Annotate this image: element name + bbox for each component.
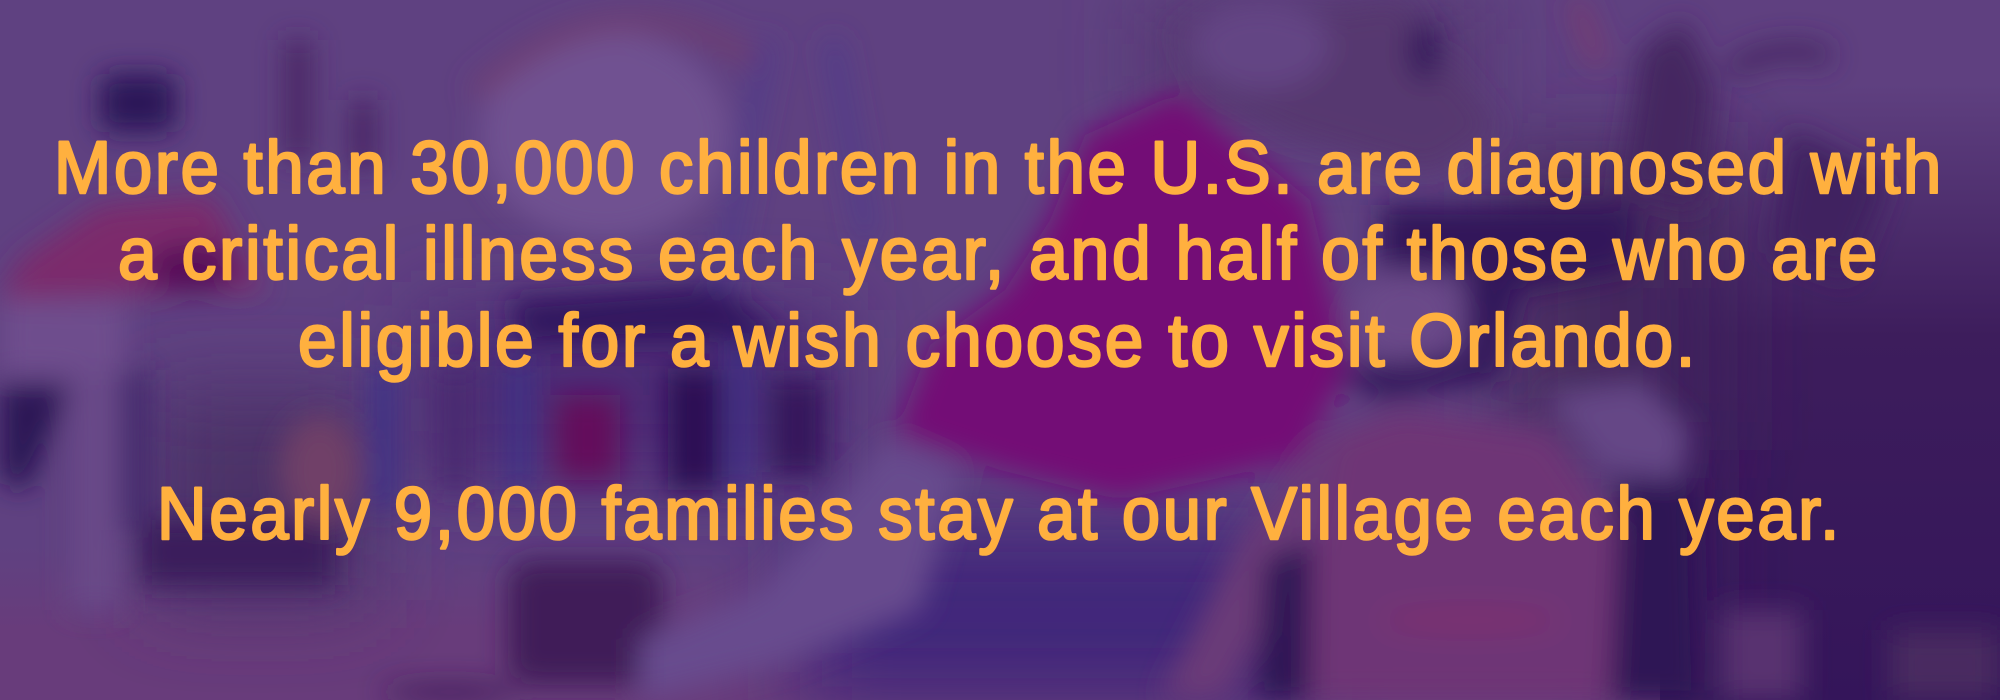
arch and red lettering — [480, 30, 730, 240]
upper-left dark objects — [100, 74, 176, 132]
red table — [0, 195, 265, 300]
coloured bars in the centre — [372, 360, 396, 510]
girl in pink — [1310, 410, 1640, 700]
text: line three: eligible for a wish choose to visit Orlando. — [298, 299, 1698, 382]
statistic text block — [54, 126, 1944, 555]
white panel at left — [0, 300, 125, 375]
magenta shirt — [895, 92, 1350, 500]
plants on the right — [1620, 20, 1715, 210]
seated figure head and mascot — [1175, 0, 1500, 175]
text: families per year: Nearly 9,000 families stay at our Village each year. — [157, 472, 1842, 555]
shelves low left — [140, 520, 335, 585]
arm and leg in pale purple — [640, 440, 960, 700]
text: line two: a critical illness each year, and half of those who are — [118, 212, 1880, 295]
dark hair shadow — [1330, 205, 1640, 400]
stool — [508, 560, 663, 685]
blue swing strings — [720, 40, 868, 290]
